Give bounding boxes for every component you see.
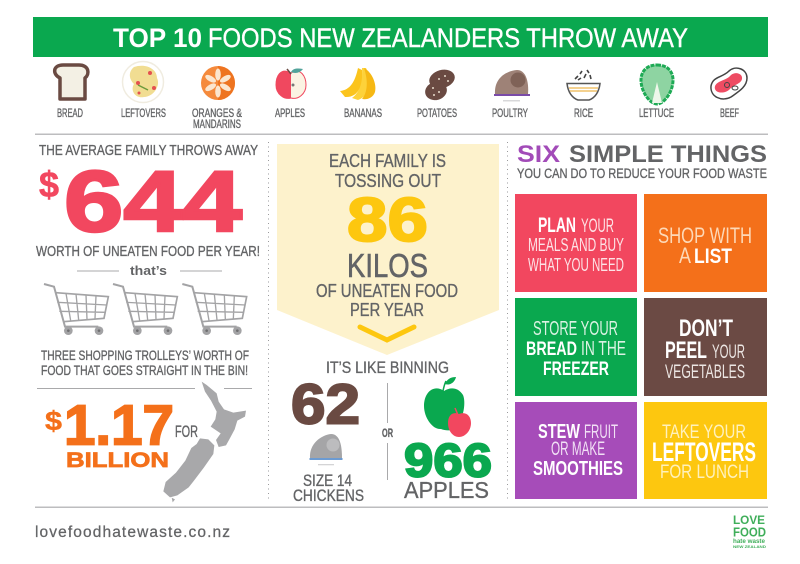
- text: or: OR: [382, 428, 393, 440]
- icon: oranges: [201, 66, 235, 100]
- tip: don't peel: [644, 298, 767, 396]
- text: three trolleys: [41, 347, 249, 378]
- tip: leftovers: [644, 402, 767, 499]
- stat: 1.17 billion: $: [45, 406, 62, 436]
- tip: plan: PLAN: [538, 214, 576, 237]
- label: oranges and mandarins: ORANGES &: [192, 108, 242, 120]
- tip: stew: SMOOTHIES: [533, 458, 623, 480]
- tip: shop: [644, 194, 767, 292]
- tip: stew: FRUIT: [584, 422, 618, 443]
- tip: plan: MEALS AND BUY: [528, 234, 624, 255]
- heading: average family: THE AVERAGE FAMILY THROWS AWAY: [39, 142, 258, 159]
- label: apples: APPLES: [275, 108, 305, 120]
- icon: bananas: [340, 68, 375, 100]
- heading: six simple things: SIMPLE THINGS: [569, 141, 767, 168]
- stat: 1.17 billion: BILLION: [66, 449, 169, 472]
- label: oranges and mandarins: MANDARINS: [193, 119, 241, 131]
- map: New Zealand: [163, 382, 246, 502]
- text: like binning: IT’S LIKE BINNING: [326, 358, 449, 377]
- logo: hate waste: [733, 538, 765, 545]
- tip: don't peel: VEGETABLES: [665, 362, 745, 383]
- label: beef: BEEF: [720, 108, 739, 120]
- text: apples: APPLES: [404, 477, 489, 503]
- tip: stew: STEW: [538, 421, 580, 443]
- stat: 644 dollars: $: [39, 164, 59, 205]
- tip: store bread: IN THE: [581, 338, 626, 360]
- text: size 14 chickens: [293, 471, 364, 505]
- logo: NEW ZEALAND: [733, 544, 766, 549]
- label: bananas: BANANAS: [344, 108, 382, 120]
- text: kilos: KILOS: [347, 247, 428, 284]
- label: bread: BREAD: [57, 108, 83, 120]
- label: potatoes: POTATOES: [417, 108, 457, 120]
- stat: 1.17 billion: 1.17: [64, 394, 174, 458]
- tip: store bread: BREAD: [526, 339, 577, 360]
- tip: don't peel: YOUR: [712, 342, 745, 363]
- tip: leftovers: FOR LUNCH: [660, 462, 749, 483]
- stat: 1.17 billion: [45, 394, 174, 472]
- icon: chevron: [360, 327, 414, 340]
- icon: apple: [276, 68, 306, 98]
- tip: store bread: FREEZER: [543, 359, 609, 380]
- food row: [55, 62, 747, 131]
- stat: 86: 86: [347, 186, 428, 255]
- icon: lettuce: [641, 65, 673, 104]
- stat: 62: 62: [291, 372, 360, 436]
- text: three trolleys: FOOD THAT GOES STRAIGHT IN THE BIN!: [41, 362, 248, 378]
- logo: [733, 515, 766, 549]
- panel: family cost: [36, 142, 260, 502]
- text: size 14 chickens: SIZE 14: [303, 471, 352, 490]
- label: leftovers: LEFTOVERS: [121, 108, 166, 120]
- yellow arrow panel: [277, 144, 499, 355]
- tip: stew: [515, 402, 637, 499]
- heading: six simple things: SIX: [517, 141, 560, 168]
- tip: leftovers: TAKE YOUR: [662, 422, 746, 443]
- icon: bread: [55, 65, 88, 99]
- icon: chicken: [310, 434, 342, 465]
- text: of uneaten food: OF UNEATEN FOOD: [316, 281, 458, 301]
- text: of uneaten food: PER YEAR: [350, 300, 424, 320]
- text: each family: TOSSING OUT: [335, 171, 441, 191]
- logo: LOVE: [733, 515, 765, 527]
- title banner: TOP 10: [113, 23, 202, 53]
- panel: six simple things: [515, 141, 767, 499]
- text: each family: EACH FAMILY IS: [329, 151, 446, 171]
- stat: 966: 966: [404, 434, 492, 486]
- label: rice: RICE: [574, 108, 593, 120]
- icon: rice bowl: [567, 70, 600, 100]
- label: poultry: POULTRY: [492, 108, 528, 120]
- tip: store bread: [515, 298, 637, 396]
- icon: apples: [424, 377, 471, 437]
- text: three trolleys: THREE SHOPPING TROLLEYS’ WORTH OF: [41, 347, 249, 363]
- title banner: [33, 17, 768, 57]
- tip: plan: YOUR: [581, 216, 614, 237]
- tip: shop: A: [679, 243, 691, 268]
- footer url: lovefoodhatewaste.co.nz: [35, 524, 230, 541]
- text: for: FOR: [175, 422, 198, 441]
- icon: three shopping trolleys: [44, 284, 247, 335]
- icon: beef: [711, 68, 747, 99]
- logo: FOOD: [733, 526, 766, 540]
- title banner: FOODS NEW ZEALANDERS THROW AWAY: [208, 23, 688, 53]
- tip: don't peel: DON’T: [679, 315, 733, 342]
- tip: stew: OR MAKE: [551, 439, 605, 460]
- tip: plan: [515, 194, 637, 292]
- text: each family: [329, 151, 446, 191]
- icon: poultry: [494, 70, 530, 102]
- text: worth of uneaten food: WORTH OF UNEATEN FOOD PER YEAR!: [36, 243, 260, 260]
- tip: plan: WHAT YOU NEED: [528, 254, 624, 275]
- text: that's: that’s: [130, 263, 167, 278]
- tip: shop: LIST: [694, 245, 732, 268]
- icon: potatoes: [423, 67, 457, 103]
- text: of uneaten food: [316, 281, 458, 320]
- icon: leftovers: [122, 62, 164, 102]
- text: size 14 chickens: CHICKENS: [293, 486, 364, 505]
- tip: store bread: STORE YOUR: [533, 318, 618, 340]
- tip: don't peel: PEEL: [665, 337, 707, 364]
- label: oranges and mandarins: [192, 108, 242, 131]
- panel: kilos tossed: [277, 144, 499, 505]
- label: lettuce: LETTUCE: [639, 108, 674, 120]
- stat: 644 dollars: 644: [64, 154, 242, 250]
- tip: shop: SHOP WITH: [658, 223, 752, 248]
